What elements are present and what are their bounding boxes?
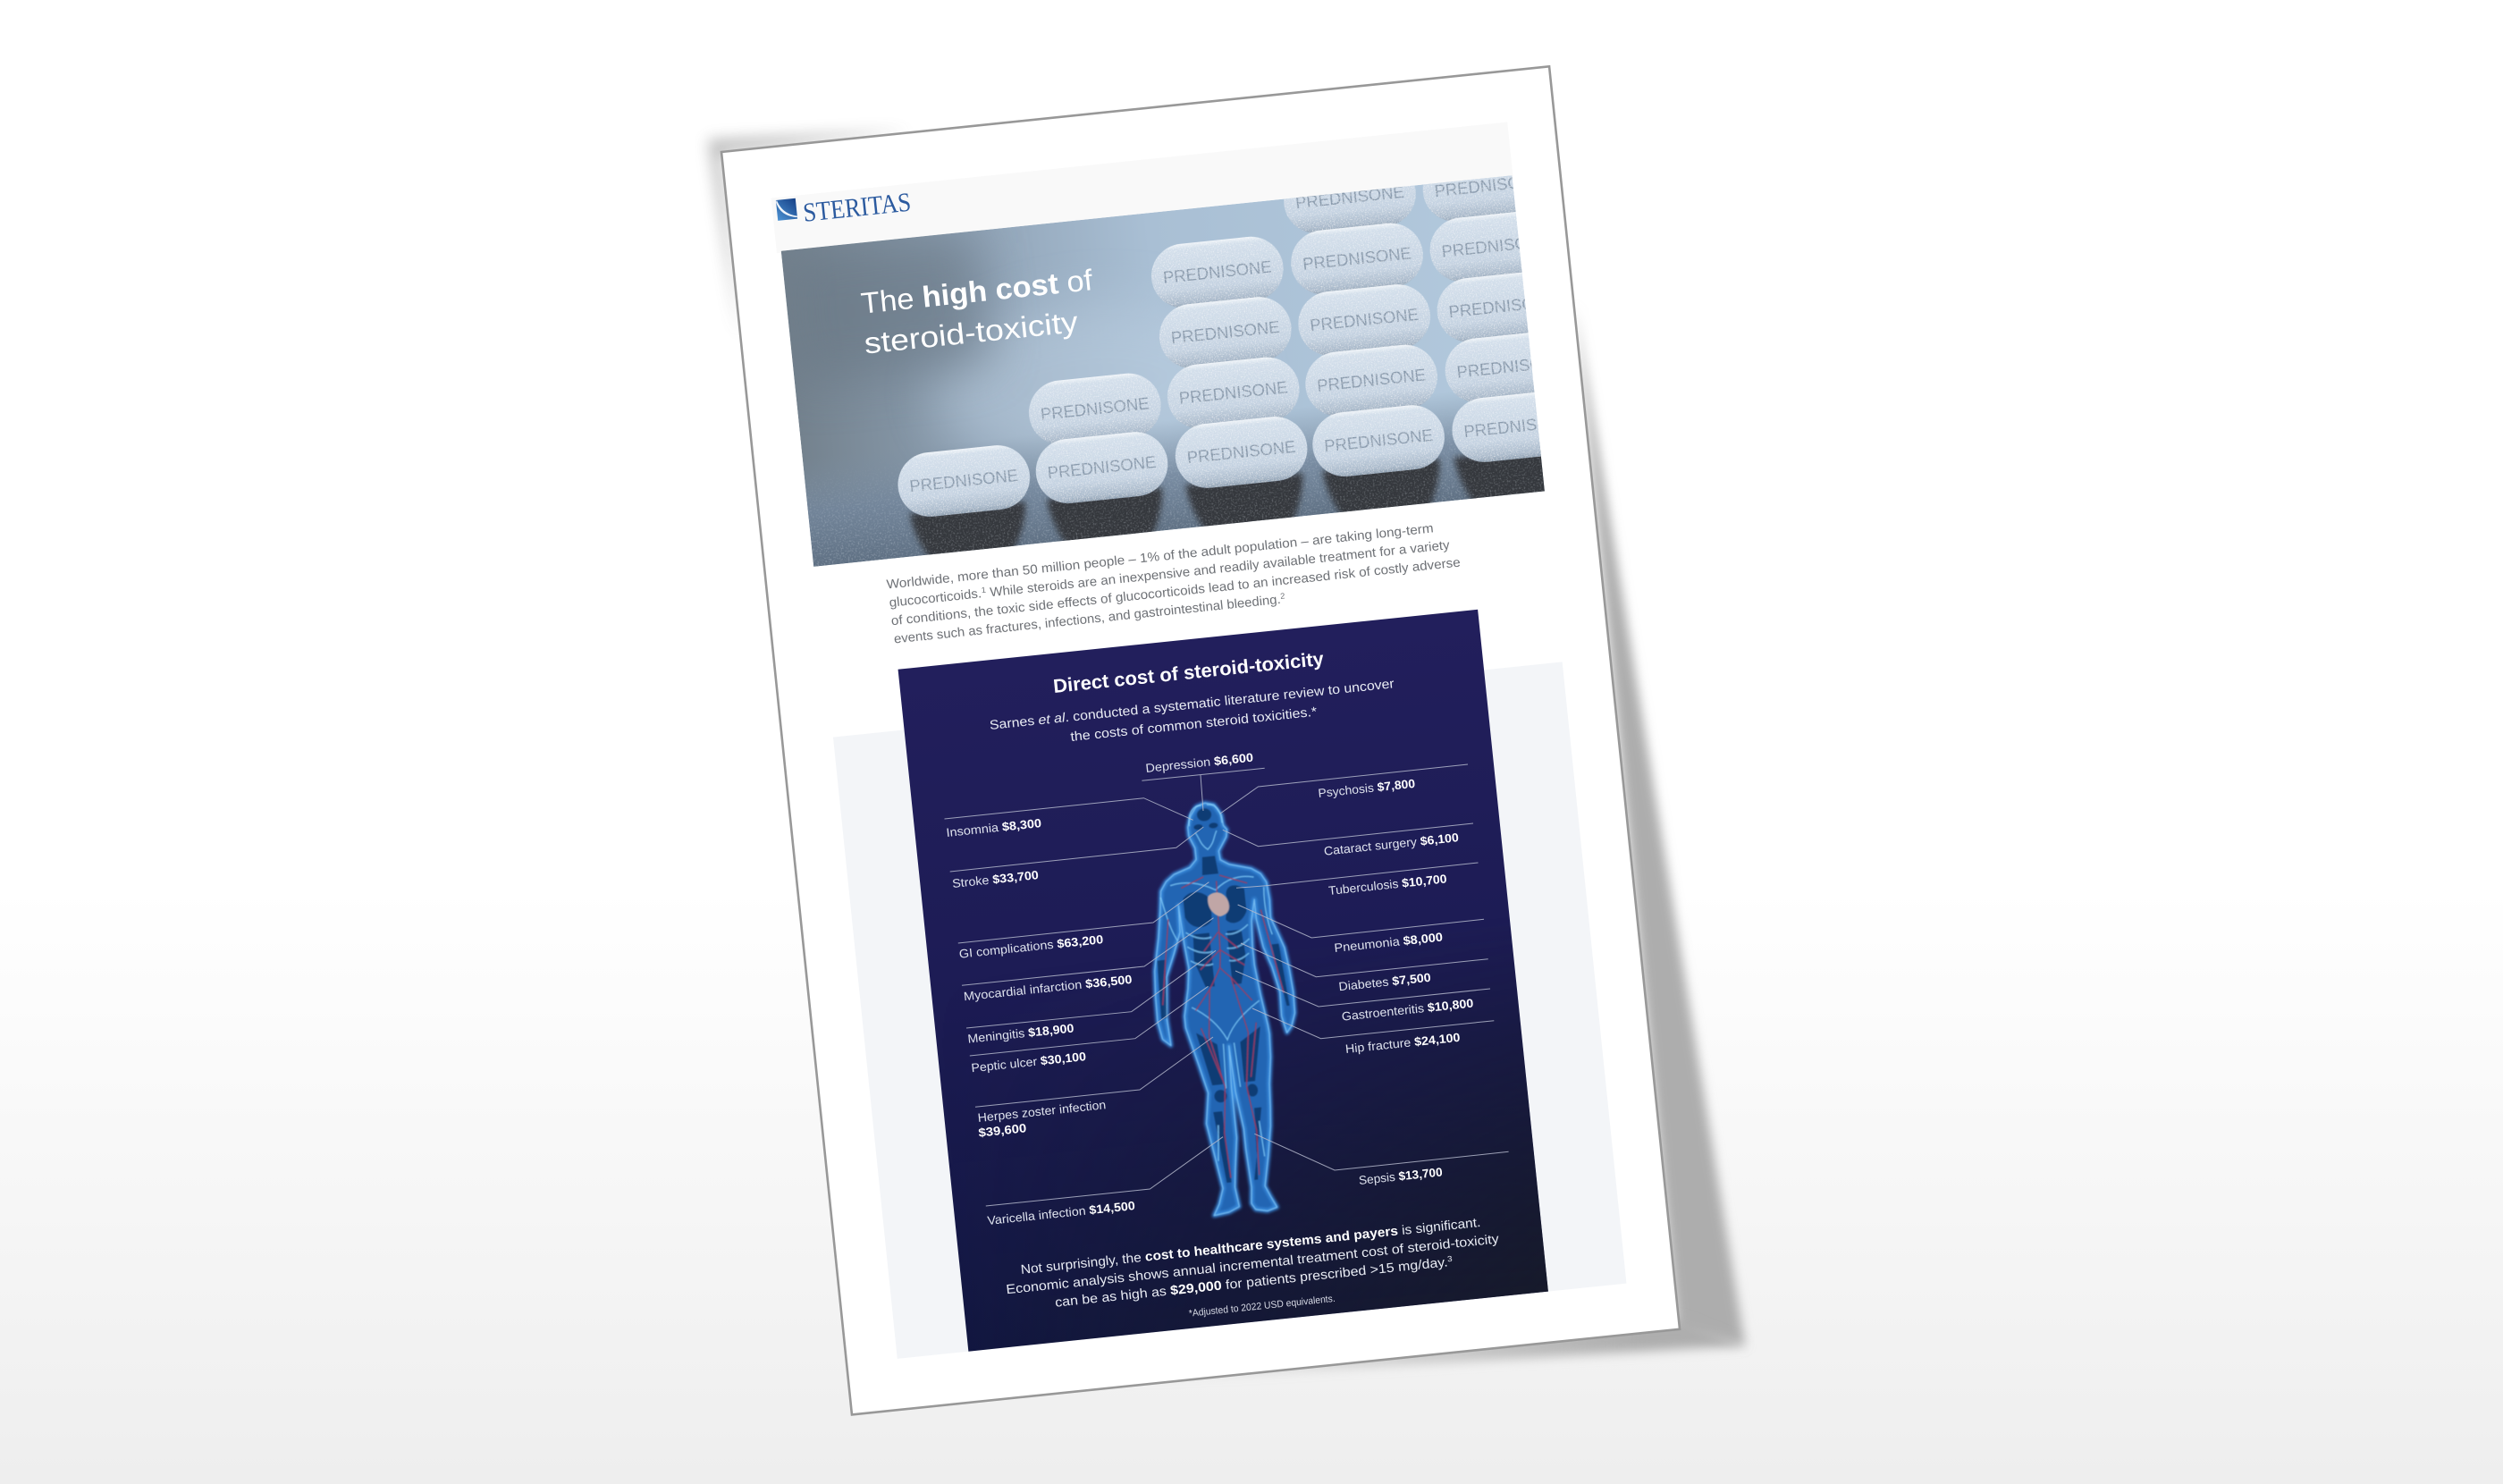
body glow and fill — [1136, 796, 1315, 1220]
tablet column 1 — [895, 443, 1033, 519]
intro paragraph: events such as fractures, infections, and gastrointestinal bleeding. — [893, 594, 1268, 646]
callout: Meningitis: Meningitis $18,900 — [967, 1021, 1075, 1046]
callout: Myocardial infarction: Myocardial infarction $36,500 — [963, 973, 1133, 1003]
callout: Insomnia: Insomnia $8,300 — [946, 816, 1042, 839]
banner title: steroid-toxicity — [863, 305, 1080, 360]
callout: Tuberculosis — [1236, 863, 1479, 898]
callout: Diabetes — [1241, 943, 1488, 993]
logo: Steritas — [776, 187, 913, 231]
tablets column 4: PREDNISONE — [1302, 244, 1412, 274]
tablets column 5: PREDNISONE — [1441, 232, 1551, 261]
tablets column 5: PREDNISONE — [1434, 172, 1544, 200]
callout: Peptic ulcer: Peptic ulcer $30,100 — [971, 1050, 1087, 1075]
tablets column 5: PREDNISONE — [1456, 352, 1566, 382]
closing statement: Not surprisingly, the cost to healthcare systems and payers is significant. — [1020, 1216, 1481, 1277]
tablet reflections on the surface — [906, 446, 1545, 555]
page drop shadow — [708, 131, 1745, 1384]
panel: direct cost dark card — [898, 610, 1548, 1352]
closing statement: can be as high as $29,000 for patients prescribed >15 mg/day. — [1054, 1258, 1428, 1311]
intro paragraph: Worldwide, more than 50 million people – 1% of the adult population – are taking long-term — [886, 521, 1434, 593]
panel: light grey backing — [833, 662, 1626, 1359]
intro paragraph: of conditions, the toxic side effects of glucocorticoids lead to an increased risk of costly adverse — [890, 556, 1461, 628]
tablets column 4: PREDNISONE — [1309, 306, 1420, 334]
human body illustration — [1136, 796, 1315, 1220]
tablets column 2 — [1025, 370, 1171, 507]
dark interior anatomy — [1141, 802, 1307, 1188]
panel subtitle: Sarnes et al. conducted a systematic literature review to uncover — [989, 677, 1395, 733]
callout: Tuberculosis: Tuberculosis $10,700 — [1327, 872, 1447, 898]
light highlights — [1151, 799, 1295, 1164]
tablets column 5: PREDNISONE — [1448, 292, 1558, 321]
intro paragraph — [886, 519, 1463, 647]
surface speckle — [807, 433, 1545, 567]
tablets column 3 — [1148, 233, 1310, 492]
callout: GI complications: GI complications $63,200 — [958, 932, 1104, 961]
panel: header background — [771, 122, 1513, 253]
callout: Meningitis — [966, 950, 1216, 1046]
callout: Varicella infection: Varicella infection $14,500 — [987, 1199, 1135, 1227]
tablets column 2: PREDNISONE — [1040, 394, 1150, 424]
callout: Cataract surgery — [1223, 823, 1473, 858]
tablets column 3: PREDNISONE — [1186, 438, 1296, 467]
callout: Sepsis: Sepsis $13,700 — [1358, 1165, 1443, 1187]
closing statement — [1006, 1216, 1500, 1311]
closing statement: 3 — [1447, 1254, 1453, 1263]
intro paragraph: glucocorticoids. — [889, 587, 978, 611]
tablet column 1: PREDNISONE — [909, 467, 1019, 495]
blood vessels — [1150, 870, 1302, 1183]
document page — [721, 66, 1680, 1414]
banner image: prednisone tablets — [781, 175, 1545, 567]
callout: Cataract surgery: Cataract surgery $6,100 — [1323, 831, 1460, 858]
callout: Stroke: Stroke $33,700 — [951, 868, 1039, 890]
tablets column 3: PREDNISONE — [1170, 318, 1280, 347]
panel subtitle: the costs of common steroid toxicities.* — [1070, 705, 1318, 745]
callout: Insomnia — [944, 798, 1193, 839]
tablets column 5: PREDNISONE — [1463, 412, 1573, 441]
callout: GI complications — [958, 882, 1209, 961]
callout: Gastroenteritis — [1235, 971, 1490, 1024]
callout: Depression: Depression $6,600 — [1145, 751, 1254, 775]
callout: Varicella infection — [986, 1137, 1223, 1227]
tablets column 4: PREDNISONE — [1323, 426, 1434, 455]
banner title: The high cost of — [859, 263, 1095, 320]
callout: Pneumonia: Pneumonia $8,000 — [1334, 931, 1444, 955]
tablets column 2: PREDNISONE — [1047, 453, 1157, 482]
callout: Hip fracture — [1252, 1008, 1494, 1056]
tablets column 3: PREDNISONE — [1178, 378, 1288, 408]
body detail — [1140, 798, 1307, 1188]
callout: Myocardial infarction — [962, 918, 1214, 1003]
tablets column 4: PREDNISONE — [1294, 183, 1405, 212]
tablets column 5 — [1423, 175, 1541, 463]
heart — [1207, 891, 1230, 917]
body rim light — [1136, 796, 1315, 1220]
closing statement: Economic analysis shows annual incremental treatment cost of steroid-toxicity — [1006, 1232, 1500, 1297]
tablets column 4 — [1284, 186, 1445, 477]
all tablets — [898, 175, 1541, 517]
callout: Psychosis: Psychosis $7,800 — [1318, 777, 1416, 800]
callout: Psychosis — [1220, 764, 1468, 814]
callout: Herpes zoster infection: $39,600 — [978, 1121, 1027, 1140]
callout: Diabetes: Diabetes $7,500 — [1338, 971, 1431, 993]
callout: Gastroenteritis: Gastroenteritis $10,800 — [1341, 997, 1474, 1024]
callout: Stroke — [950, 827, 1203, 890]
tablets column 3: PREDNISONE — [1162, 257, 1272, 287]
banner title — [858, 263, 1099, 360]
callout: Herpes zoster infection: Herpes zoster infection — [977, 1098, 1107, 1125]
logo: Steritas: STERITAS — [802, 188, 913, 228]
intro paragraph: 2 — [1280, 591, 1285, 601]
intro paragraph: 1 — [981, 586, 986, 594]
callout: Sepsis — [1254, 1134, 1509, 1187]
tablets column 4: PREDNISONE — [1316, 366, 1427, 395]
footnote: *Adjusted to 2022 USD equivalents. — [1188, 1294, 1336, 1320]
panel title: Direct cost of steroid-toxicity — [1052, 648, 1325, 697]
callout: Peptic ulcer — [970, 986, 1209, 1075]
callout: Pneumonia — [1238, 905, 1484, 955]
intro paragraph: While steroids are an inexpensive and readily available treatment for a variety — [985, 538, 1451, 601]
callout: Depression — [1142, 751, 1265, 811]
callout: Hip fracture: Hip fracture $24,100 — [1344, 1031, 1461, 1056]
callout: Herpes zoster infection — [975, 1037, 1213, 1140]
